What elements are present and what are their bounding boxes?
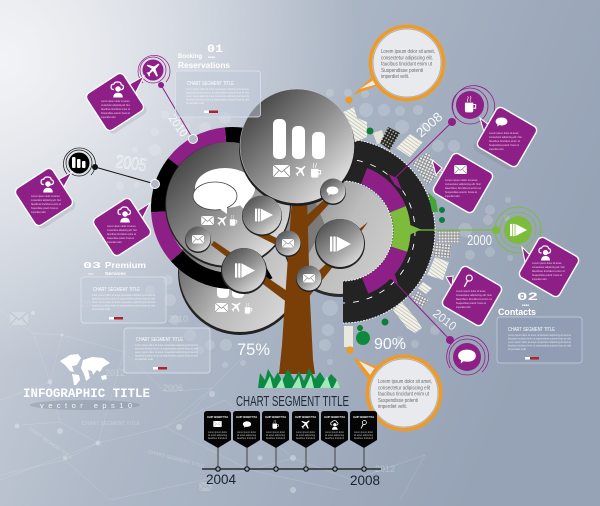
callout: bottom orange bubble: imperdiet velit. bbox=[378, 404, 407, 410]
tag: cup: faucibus tincidunt bbox=[266, 436, 285, 440]
section heading: 01 booking: 01 bbox=[207, 44, 223, 56]
panel: booking reservations: CHART SEGMENT TITLE bbox=[187, 81, 235, 87]
card: middle right: faucibus tincidunt enim ut bbox=[445, 186, 481, 190]
panel: premium services: faucibus tincidunt enim ut suspendisse potenti fusce at velit bbox=[92, 296, 155, 300]
panel: booking reservations: Lorem ipsum dolor sit amet consectetur adipiscing elit sed do bbox=[186, 94, 249, 98]
callout: bottom orange bubble: faucibus tincidunt enim ut bbox=[378, 392, 429, 398]
panel: contacts: CHART SEGMENT TITLE bbox=[508, 327, 556, 333]
card: far right: imperdiet velit. bbox=[532, 277, 547, 281]
ring: lower black segment bbox=[177, 256, 268, 281]
card: top right bbox=[472, 106, 538, 171]
timeline bbox=[202, 411, 381, 488]
section heading: 03 premium: 03 bbox=[83, 261, 101, 271]
tag: envelope bbox=[204, 411, 231, 471]
section heading: 02 contacts bbox=[498, 292, 538, 317]
panel: lower chart segment: Lorem ipsum dolor sit amet consectetur adipiscing elit sed do bbox=[135, 350, 198, 354]
tree trunk and branches bbox=[211, 198, 368, 374]
card: middle right: Lorem ipsum dolor sit amet, bbox=[445, 178, 478, 182]
tag: envelope: Lorem ipsum dolor bbox=[208, 430, 227, 434]
card: lower left: imperdiet velit. bbox=[107, 240, 122, 244]
section heading: 02 contacts: 02 bbox=[517, 292, 538, 304]
card: top right: Suspendisse potenti. Fusce at bbox=[489, 143, 519, 147]
panel: booking reservations: imperdiet velit bbox=[186, 101, 204, 105]
shadow under title bbox=[30, 400, 140, 410]
tag: magnifier bbox=[350, 411, 377, 471]
card: top right: consectetur adipiscing elit. Nun bbox=[489, 135, 522, 139]
year: 2008: 2008 bbox=[413, 109, 445, 140]
tag: plane: Lorem ipsum dolor bbox=[296, 430, 315, 434]
callout: bottom orange bubble: Lorem ipsum dolor sit amet, bbox=[378, 379, 432, 385]
card: lower left bbox=[92, 197, 152, 257]
small node discs bbox=[185, 178, 346, 292]
icon: bars bbox=[273, 119, 325, 159]
panel: lower chart segment: faucibus tincidunt enim ut suspendisse potenti fusce at velit bbox=[135, 346, 198, 350]
card: magnifier: Suspendisse potenti. Fusce at bbox=[456, 301, 486, 305]
panel: lower chart segment bbox=[124, 328, 210, 373]
section heading: 01 booking bbox=[178, 44, 230, 70]
panel: lower chart segment: Lorem ipsum dolor sit amet consectetur adipiscing elit sed do bbox=[135, 343, 198, 347]
callout: top orange bubble: Suspendisse potenti bbox=[381, 68, 423, 74]
tag: magnifier: CHART SEGMENT TITLE bbox=[353, 415, 374, 419]
ghost labels and envelopes: 2012 bbox=[375, 464, 395, 474]
panel: premium services: imperdiet velit bbox=[92, 307, 110, 311]
callout: top orange bubble: faucibus tincidunt enim ut bbox=[381, 62, 432, 68]
leader: plane to ring bbox=[158, 82, 198, 144]
icon circle: play green bbox=[495, 207, 541, 253]
tag: cloud person: faucibus tincidunt bbox=[325, 436, 344, 440]
ghost labels and envelopes: 2012 bbox=[105, 368, 125, 378]
card: magnifier bbox=[441, 265, 503, 327]
card: far right: consectetur adipiscing elit. Nun bbox=[532, 265, 565, 269]
panel: contacts: Lorem ipsum dolor sit amet consectetur adipiscing elit sed do bbox=[508, 340, 571, 344]
tag: speech: sit amet adipiscing bbox=[237, 433, 256, 437]
panel: lower chart segment: faucibus tincidunt enim ut suspendisse potenti fusce at velit bbox=[135, 354, 198, 358]
ghost labels and envelopes: 20 bbox=[81, 299, 91, 309]
callout: top orange bubble: imperdiet velit. bbox=[381, 74, 409, 80]
icon circle: speech bbox=[447, 336, 489, 375]
road arc bbox=[343, 139, 435, 323]
tag: cup: sit amet adipiscing bbox=[266, 433, 285, 437]
icon circle: cup bbox=[452, 86, 495, 124]
tag: cloud person: sit amet adipiscing bbox=[325, 433, 344, 437]
panel: contacts: Lorem ipsum dolor sit amet consectetur adipiscing elit sed do bbox=[508, 333, 571, 337]
panel: contacts: imperdiet velit bbox=[508, 347, 526, 351]
panel: booking reservations: Lorem ipsum dolor sit amet consectetur adipiscing elit sed do bbox=[186, 87, 249, 91]
panel: contacts bbox=[497, 317, 582, 363]
card: middle left: imperdiet velit. bbox=[31, 210, 46, 214]
leader: top right purple bbox=[395, 118, 456, 178]
grass bbox=[258, 368, 340, 388]
section heading: 03 premium: Premium bbox=[105, 260, 146, 270]
disc: lower left bbox=[178, 210, 302, 335]
card: top right: faucibus tincidunt enim ut bbox=[489, 139, 520, 143]
section heading: 02 contacts: •••• bbox=[522, 303, 529, 309]
panel: lower chart segment: imperdiet velit bbox=[135, 357, 153, 361]
tag: magnifier: faucibus tincidunt bbox=[354, 436, 373, 440]
tag: plane: faucibus tincidunt bbox=[296, 436, 315, 440]
tag: envelope: CHART SEGMENT TITLE bbox=[207, 415, 228, 419]
world map icon bbox=[60, 354, 110, 385]
card: far right: Lorem ipsum dolor sit amet, bbox=[532, 261, 562, 265]
panel: lower chart segment: CHART SEGMENT TITLE bbox=[136, 337, 184, 343]
year: 2005: 2005 bbox=[114, 151, 148, 175]
tag: cloud person: CHART SEGMENT TITLE bbox=[324, 415, 345, 419]
play discs bbox=[221, 196, 365, 294]
callout: top orange bubble bbox=[345, 26, 444, 104]
panel: premium services: Lorem ipsum dolor sit amet consectetur adipiscing elit sed do bbox=[92, 300, 155, 304]
section heading: 03 premium bbox=[83, 260, 146, 276]
ghost labels and envelopes: 2010 bbox=[168, 314, 188, 324]
timeline axis bbox=[202, 468, 381, 470]
card: lower left: faucibus tincidunt enim ut bbox=[107, 232, 136, 236]
tag: speech bbox=[233, 411, 260, 471]
callout: bottom orange bubble: Suspendisse potenti bbox=[378, 398, 418, 404]
year: 2010 lower: 2010 bbox=[430, 306, 460, 334]
card: middle right: Suspendisse potenti. Fusce at bbox=[445, 190, 477, 194]
ring: purple and black segments bbox=[159, 135, 268, 256]
callout: top orange bubble: consectetur adipiscing elit. bbox=[381, 56, 433, 62]
panel: booking reservations: faucibus tincidunt enim ut suspendisse potenti fusce at velit bbox=[186, 90, 249, 94]
disc: right gray bbox=[283, 182, 397, 297]
tag: envelope: sit amet adipiscing bbox=[208, 433, 227, 437]
tag: envelope: faucibus tincidunt bbox=[208, 436, 227, 440]
card: lower left: Suspendisse potenti. Fusce at bbox=[107, 236, 134, 240]
ghost labels and envelopes: CHART SEGMENT TITLE bbox=[27, 426, 73, 460]
icon: large speech bubble bbox=[193, 168, 255, 216]
tag: magnifier: Lorem ipsum dolor bbox=[354, 430, 373, 434]
tag: speech: CHART SEGMENT TITLE bbox=[236, 415, 257, 419]
city buildings bbox=[343, 107, 460, 347]
leader: lower purple bbox=[393, 280, 454, 344]
card: lower left: Lorem ipsum dolor sit amet, bbox=[107, 224, 136, 228]
card: top left: Suspendisse potenti. Fusce at bbox=[101, 111, 130, 115]
card: top left: Lorem ipsum dolor sit amet, bbox=[101, 99, 130, 103]
callout: top orange bubble: Lorem ipsum dolor sit amet, bbox=[381, 49, 435, 55]
leader: chart to ring bbox=[92, 164, 160, 188]
card: magnifier: consectetur adipiscing elit. Nun bbox=[456, 293, 492, 297]
card: middle right: imperdiet velit. bbox=[445, 194, 460, 198]
section heading: 02 contacts: Contacts bbox=[498, 307, 536, 317]
card: top right: imperdiet velit. bbox=[489, 147, 504, 151]
90 percent: 90% bbox=[374, 336, 406, 353]
card: middle right bbox=[432, 152, 494, 214]
callout: bottom orange bubble: consectetur adipiscing elit bbox=[378, 386, 430, 392]
card: middle left: Lorem ipsum dolor sit amet, bbox=[31, 194, 60, 198]
background bokeh dots bbox=[116, 89, 513, 368]
card: top right: Lorem ipsum dolor sit amet, bbox=[489, 131, 519, 135]
card: top left: faucibus tincidunt enim ut bbox=[101, 107, 130, 111]
card: top left bbox=[85, 72, 148, 135]
panel: premium services: Lorem ipsum dolor sit amet consectetur adipiscing elit sed do bbox=[92, 293, 155, 297]
icon circle: bar chart bbox=[63, 148, 95, 176]
panel: contacts: faucibus tincidunt enim ut suspendisse potenti fusce at velit bbox=[508, 344, 571, 348]
panel: booking reservations: faucibus tincidunt enim ut suspendisse potenti fusce at velit bbox=[186, 98, 249, 102]
card: magnifier: Lorem ipsum dolor sit amet, bbox=[456, 289, 486, 293]
leader: green bbox=[408, 226, 500, 234]
tag: speech: Lorem ipsum dolor bbox=[237, 430, 256, 434]
ghost labels and envelopes: 2006 bbox=[163, 383, 183, 393]
card: far right bbox=[518, 236, 580, 298]
year 2008: 2008 bbox=[350, 473, 380, 488]
tag: cloud person: Lorem ipsum dolor bbox=[325, 430, 344, 434]
card: far right: Suspendisse potenti. Fusce at bbox=[532, 273, 562, 277]
tag: speech: faucibus tincidunt bbox=[237, 436, 256, 440]
callout: bottom orange bubble bbox=[346, 346, 440, 430]
section heading: 01 booking: Reservations bbox=[178, 60, 230, 70]
panel: premium services: faucibus tincidunt enim ut suspendisse potenti fusce at velit bbox=[92, 304, 155, 308]
tag: cup bbox=[262, 411, 289, 471]
card: middle right: consectetur adipiscing elit. Nun bbox=[445, 182, 481, 186]
panel: premium services bbox=[81, 277, 166, 323]
tag: plane bbox=[292, 411, 319, 471]
card: top left: consectetur adipiscing elit. Nun bbox=[101, 103, 130, 107]
card: top left: imperdiet velit. bbox=[101, 115, 116, 119]
card: magnifier: faucibus tincidunt enim ut bbox=[456, 297, 492, 301]
tag: cup: Lorem ipsum dolor bbox=[266, 430, 285, 434]
icon circle: plane bbox=[138, 55, 170, 83]
disc: top with bar chart bbox=[239, 89, 355, 206]
year 2004: 2004 bbox=[206, 472, 237, 487]
card: middle left: Suspendisse potenti. Fusce at bbox=[31, 206, 58, 210]
panel: contacts: faucibus tincidunt enim ut suspendisse potenti fusce at velit bbox=[508, 336, 571, 340]
road segments: purple, green, purple bbox=[364, 174, 421, 286]
tag: plane: CHART SEGMENT TITLE bbox=[295, 415, 316, 419]
card: middle left: consectetur adipiscing elit. Nun bbox=[31, 198, 61, 202]
75 percent: 75% bbox=[237, 341, 270, 359]
panel: premium services: CHART SEGMENT TITLE bbox=[93, 287, 141, 293]
section heading: 03 premium: Services bbox=[105, 271, 126, 276]
ghost labels and envelopes bbox=[10, 299, 395, 491]
title: INFOGRAPHIC TITLE bbox=[23, 386, 150, 401]
chart segment title: CHART SEGMENT TITLE bbox=[236, 393, 349, 410]
card: magnifier: imperdiet velit. bbox=[456, 305, 471, 309]
subtitle: vector eps10 bbox=[40, 401, 132, 410]
card: lower left: consectetur adipiscing elit. Nun bbox=[107, 228, 137, 232]
tag: cup: CHART SEGMENT TITLE bbox=[265, 415, 286, 419]
background network mesh bbox=[0, 310, 425, 500]
year: 2000: 2000 bbox=[467, 232, 492, 249]
section heading: 01 booking: Booking bbox=[178, 53, 202, 60]
card: middle left: faucibus tincidunt enim ut bbox=[31, 202, 61, 206]
section heading: 01 booking: •••• bbox=[208, 55, 215, 61]
panel: booking reservations bbox=[176, 71, 260, 117]
disc: left with speech bubbles bbox=[165, 142, 291, 268]
ghost labels and envelopes: CHART SEGMENT TITLE bbox=[147, 449, 206, 470]
section heading: 03 premium: •••• bbox=[88, 271, 94, 276]
card: middle left bbox=[14, 167, 77, 230]
tag: magnifier: sit amet adipiscing bbox=[354, 433, 373, 437]
tag: cloud person bbox=[321, 411, 348, 471]
year: 2010 rotated: 2010 bbox=[166, 112, 191, 140]
ghost labels and envelopes: CHART SEGMENT TITLE bbox=[82, 421, 141, 427]
tag: plane: sit amet adipiscing bbox=[296, 433, 315, 437]
card: far right: faucibus tincidunt enim ut bbox=[532, 269, 565, 273]
